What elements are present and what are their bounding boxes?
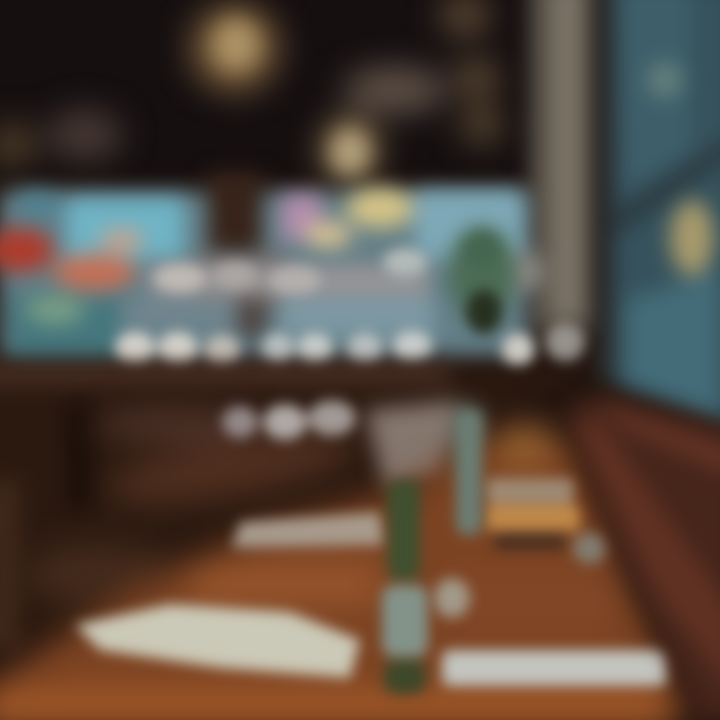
place settings and plates [75, 478, 667, 686]
green plant [448, 226, 516, 334]
green bottle [382, 410, 482, 694]
central vase [358, 388, 494, 492]
colourful mural [0, 172, 528, 360]
dark counter and chairs [0, 364, 580, 650]
rows of glassware [115, 248, 585, 367]
wooden table [0, 423, 690, 720]
pendant lamps [0, 0, 504, 184]
leather bench [565, 395, 720, 720]
dark ceiling [0, 0, 550, 180]
grey column [530, 0, 598, 330]
teal right panel [596, 0, 720, 430]
